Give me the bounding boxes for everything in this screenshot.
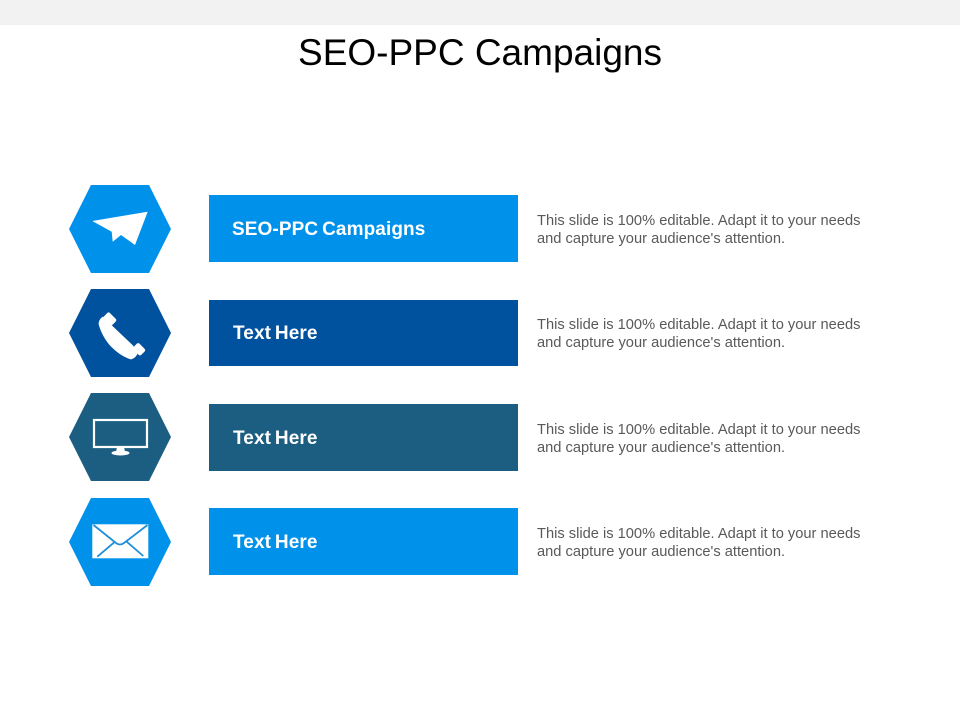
bar: Text Here 2: Text Here — [233, 428, 318, 448]
bar: SEO-PPC Campaigns: SEO-PPC Campaigns — [232, 218, 425, 240]
description 2: This slide is 100% editable. Adapt it to your needs — [537, 317, 860, 333]
icon: paper plane hexagon — [69, 185, 171, 273]
description 4: and capture your audience's attention. — [537, 544, 785, 560]
bar: Text Here 1: Text Here — [233, 323, 318, 344]
description 3: and capture your audience's attention. — [537, 440, 785, 456]
description 4: This slide is 100% editable. Adapt it to your needs — [537, 526, 860, 542]
description 3 — [537, 422, 860, 456]
bar: SEO-PPC Campaigns — [209, 195, 518, 262]
bar: Text Here 3: Text Here — [233, 532, 318, 553]
top grey band — [0, 0, 960, 25]
icon: telephone hexagon — [69, 289, 171, 377]
description 4 — [537, 526, 860, 560]
description 2: and capture your audience's attention. — [537, 335, 785, 351]
icon: monitor hexagon — [69, 393, 171, 481]
description 1: This slide is 100% editable. Adapt it to your needs — [537, 213, 860, 229]
bar: Text Here 2 — [209, 404, 518, 471]
bar: Text Here 1 — [209, 300, 518, 366]
bar: Text Here 3 — [209, 508, 518, 575]
description 3: This slide is 100% editable. Adapt it to your needs — [537, 422, 860, 438]
icon: envelope hexagon — [69, 498, 171, 586]
title: SEO-PPC Campaigns — [298, 32, 662, 73]
description 1 — [537, 213, 860, 247]
description 1: and capture your audience's attention. — [537, 231, 785, 247]
description 2 — [537, 317, 860, 351]
